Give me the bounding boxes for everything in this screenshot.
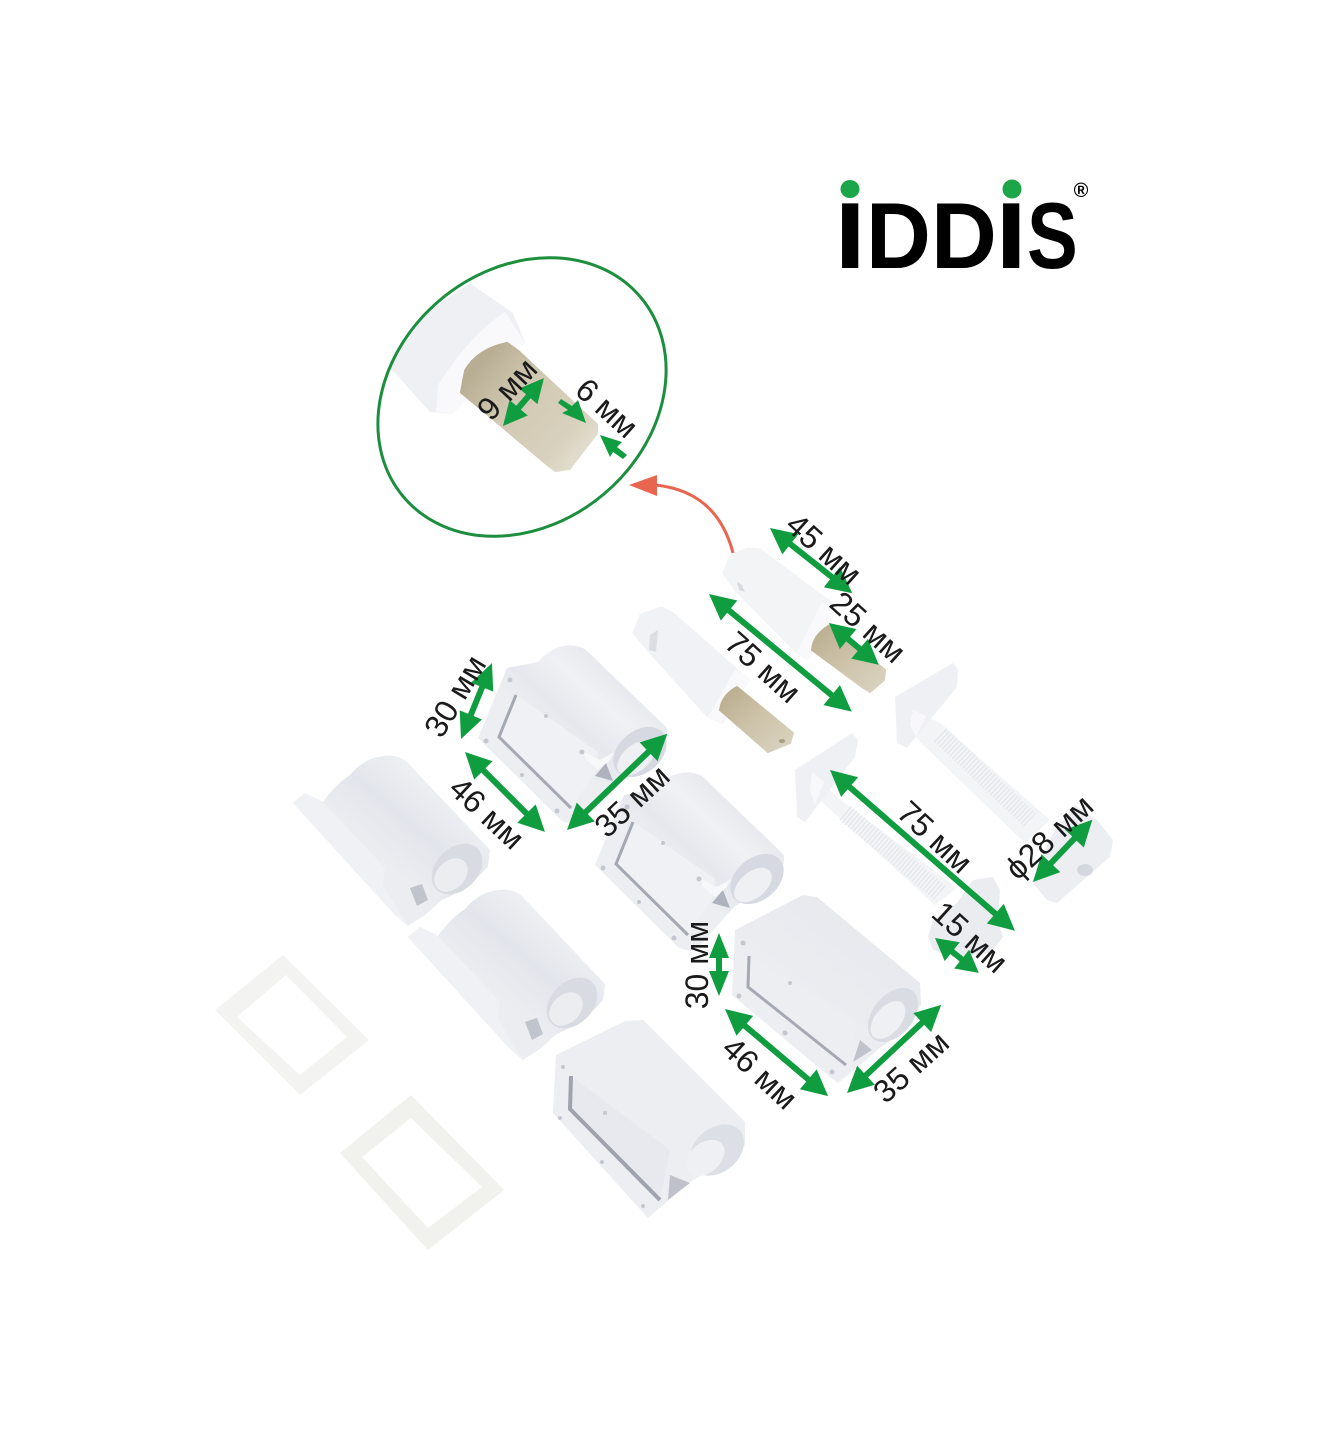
red arrow from plug to callout (629, 475, 733, 553)
dimension: 46 mm upper (442, 743, 554, 856)
dimension: 46 mm lower (715, 999, 837, 1116)
dimension: diameter 28 mm: ϕ28 мм (998, 788, 1100, 886)
plug with long pin (lower) (634, 608, 793, 752)
dimension: 9 mm: 9 мм (470, 351, 544, 427)
housing block B (middle) (595, 772, 793, 951)
dimension: 6 mm: 6 мм (569, 371, 645, 445)
housing block A (top) (478, 645, 676, 824)
half shell F (408, 890, 607, 1060)
callout: enlarged pin detail in green ellipse (376, 256, 668, 538)
dimension: 25 mm pin: 25 мм (823, 584, 913, 670)
gasket frame (upper) (215, 955, 369, 1095)
enlarged beige pin (462, 344, 596, 470)
dimension: 35 mm lower: 35 мм (866, 1024, 956, 1110)
brand logo: IDDIS: D (866, 184, 931, 288)
dimension: 35 mm upper: 35 мм (587, 758, 677, 844)
plug with short pin (upper) (724, 549, 885, 692)
dimension: 35 mm upper (558, 724, 677, 844)
dimension: 46 mm lower: 46 мм (715, 1030, 805, 1116)
brand logo: IDDIS: D (931, 183, 997, 288)
housing block C (lower right) (732, 895, 928, 1083)
brand logo: IDDIS: S (1027, 184, 1078, 289)
dimension: 45 mm plug body: 45 мм (779, 506, 869, 592)
dimension: 75 mm plug (701, 584, 860, 722)
brand logo: IDDIS (834, 180, 1089, 289)
dimension: 75 mm screw (821, 760, 1023, 941)
gasket frame (lower) (340, 1095, 504, 1250)
green ellipse outline (322, 200, 722, 594)
housing block D (bottom) (553, 1020, 754, 1218)
screw with square plate (lower) (795, 733, 1003, 957)
dimension: 75 mm plug: 75 мм (718, 624, 808, 710)
enlarged white plug body (391, 283, 524, 414)
dimension: 30 mm upper: 30 мм (417, 649, 493, 743)
brand logo: IDDIS: I (834, 184, 866, 289)
dimension: 30 mm vertical: 30 мм (679, 921, 715, 1009)
half shell E (293, 756, 492, 926)
dimension: 46 mm upper: 46 мм (442, 770, 532, 856)
dimension: 15 mm: 15 мм (925, 894, 1015, 980)
brand logo: IDDIS: I (996, 184, 1027, 289)
dimension: 35 mm lower (838, 995, 956, 1110)
brand logo: IDDIS: ® (1074, 180, 1089, 202)
dimension: 75 mm screw: 75 мм (890, 794, 980, 880)
screw with square plate (upper right) (895, 663, 1113, 903)
